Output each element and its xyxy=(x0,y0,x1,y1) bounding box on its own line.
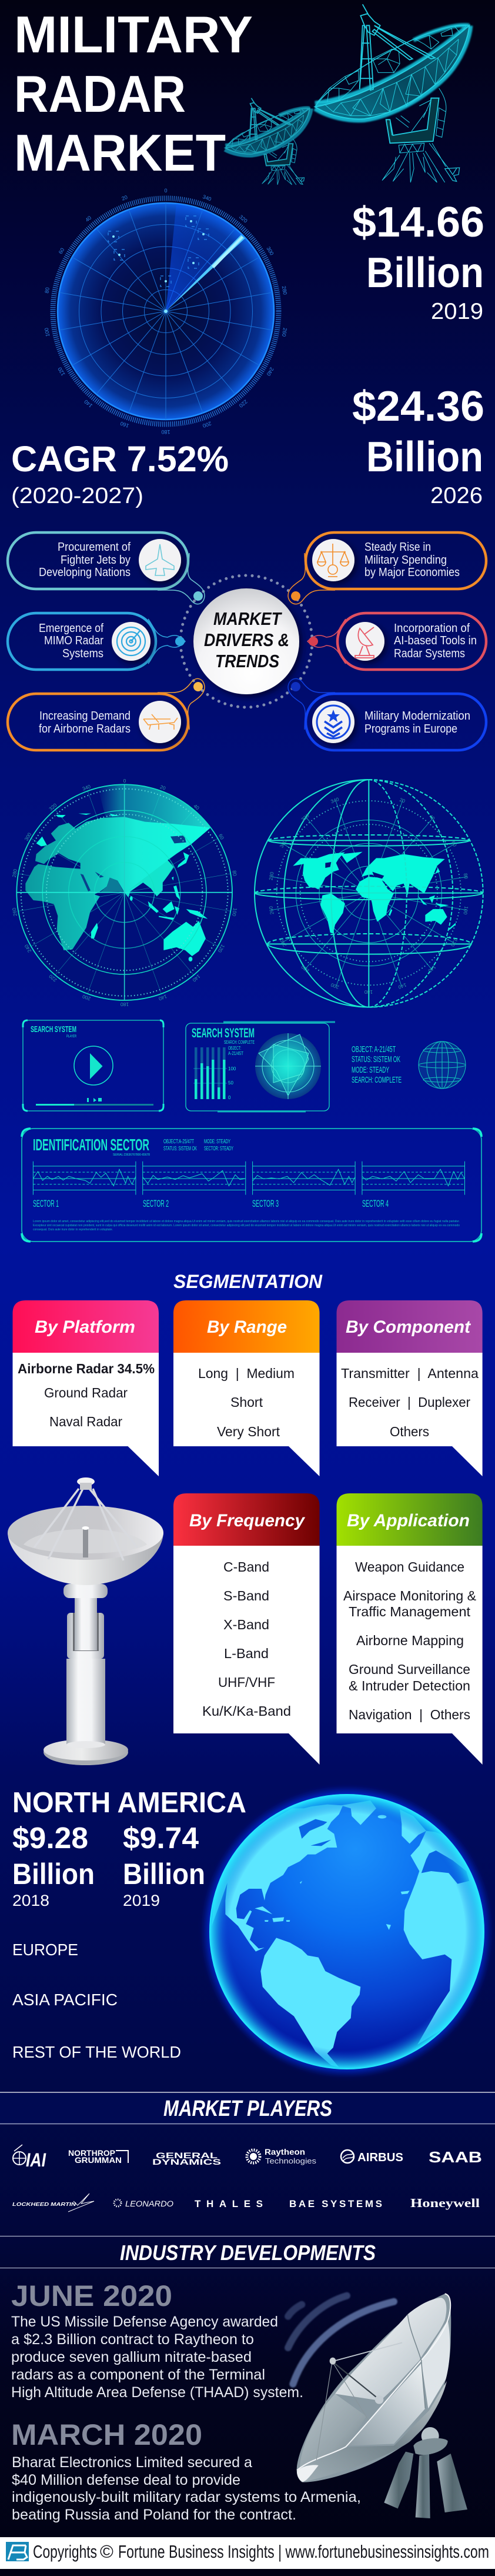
driver: emergence of MIMO radar xyxy=(8,613,156,670)
centre circle xyxy=(193,588,299,694)
region list: REST OF THE WORLD xyxy=(12,2043,181,2061)
bar chart: 50 xyxy=(228,1080,233,1086)
radar globe labels: 280 xyxy=(11,868,18,878)
title: MILITARY xyxy=(14,5,253,64)
development: March 2020: $40 Million defense deal to provide xyxy=(12,2472,240,2488)
radar degree labels: 200 xyxy=(202,420,212,429)
driver: military spending: Military Spending xyxy=(364,554,447,567)
driver: military modernization: Military Modernization xyxy=(364,710,470,723)
panel: identification sector: SERIAL:23636767800-65678 xyxy=(113,1153,150,1157)
logo: IAI: IAI xyxy=(26,2149,46,2171)
sector line charts xyxy=(33,1161,464,1195)
card: by platform xyxy=(13,1300,159,1476)
company logos xyxy=(12,2145,482,2212)
card: by frequency: L-Band xyxy=(224,1646,269,1661)
development: June 2020: a $2.3 Billion contract to Raytheon to xyxy=(11,2331,254,2348)
signal waves xyxy=(288,2296,394,2384)
icon: play button xyxy=(74,1046,113,1085)
radar degree labels: 340 xyxy=(202,194,212,202)
dish panels xyxy=(297,2294,451,2482)
heading: segmentation: SEGMENTATION xyxy=(173,1271,323,1292)
panel: identification sector: MODE: STEADY xyxy=(204,1139,230,1145)
icon: radar dish on pedestal xyxy=(8,1477,163,1765)
card: by range: Very Short xyxy=(217,1424,280,1439)
wireframe globe labels: 280 xyxy=(267,871,275,881)
card: by frequency: S-Band xyxy=(223,1588,269,1603)
development: March 2020: Bharat Electronics Limited secured a xyxy=(12,2454,252,2471)
driver: military spending: Steady Rise in xyxy=(364,541,431,554)
market players band: MARKET PLAYERS xyxy=(163,2096,332,2121)
driver: military modernization xyxy=(306,694,486,750)
wireframe globe labels: 20 xyxy=(399,797,406,804)
driver: AI-based tools xyxy=(337,613,486,670)
card: by platform: By Platform xyxy=(35,1317,135,1337)
logo: Northrop Grumman: NORTHROP xyxy=(68,2148,115,2158)
bar chart: OBJECT: xyxy=(228,1046,241,1051)
logo: BAE Systems: BAE SYSTEMS xyxy=(289,2198,382,2209)
card: by frequency xyxy=(173,1493,320,1765)
wireframe globe labels: 40 xyxy=(428,813,436,821)
stat: 2019 market size: Billion xyxy=(366,249,484,297)
dotted ring xyxy=(180,575,312,707)
wireframe globe labels xyxy=(267,796,470,995)
radar degree labels: 60 xyxy=(58,247,65,255)
radar degree labels: 0 xyxy=(164,188,168,194)
panel: identification sector: SECTOR: STEADY xyxy=(204,1146,233,1152)
region list: EUROPE xyxy=(12,1941,78,1959)
radar globe labels: 100 xyxy=(231,907,238,917)
driver: military modernization: Programs in Europe xyxy=(364,723,457,735)
radar degree labels: 80 xyxy=(44,287,51,294)
radar globe labels: 320 xyxy=(48,802,58,812)
wireframe globe labels: 260 xyxy=(267,906,275,915)
radar globe labels: 220 xyxy=(48,973,58,983)
radar degree labels: 140 xyxy=(83,398,93,409)
radar degree labels: 20 xyxy=(121,194,128,202)
driver: military spending: by Major Economies xyxy=(364,566,460,579)
feed arm xyxy=(316,2343,402,2459)
radar degree labels: 120 xyxy=(56,366,66,377)
wireframe globe labels: 100 xyxy=(462,906,470,915)
wireframe globe labels: 80 xyxy=(463,873,469,880)
region: North America stats: 2019 xyxy=(123,1892,160,1909)
footer xyxy=(0,2537,495,2569)
status text block: MODE: STEADY xyxy=(352,1065,389,1075)
development: June 2020 xyxy=(11,2279,303,2401)
card: by platform: Ground Radar xyxy=(44,1385,128,1400)
wireframe globe labels: 180 xyxy=(364,989,373,995)
logo: Northrop Grumman xyxy=(68,2148,128,2165)
driver: emergence of MIMO radar: Systems xyxy=(62,647,103,660)
development: June 2020: radars as a component of the Terminal xyxy=(11,2367,265,2383)
icon: mini wireframe globe xyxy=(419,1041,466,1089)
card: by frequency: By Frequency xyxy=(189,1511,305,1530)
fine print xyxy=(33,1220,460,1232)
card: by application: Weapon Guidance xyxy=(355,1559,464,1575)
card: by component: Others xyxy=(390,1424,429,1439)
logo: General Dynamics: DYNAMICS xyxy=(152,2157,221,2166)
development: March 2020 xyxy=(11,2418,361,2523)
sweep wedge xyxy=(98,784,210,893)
radar globe labels: 240 xyxy=(23,943,32,954)
radar globe labels: 20 xyxy=(159,784,166,791)
panel: identification sector: STATUS: SISTEM OK xyxy=(163,1146,197,1152)
development: June 2020: JUNE 2020 xyxy=(11,2279,172,2312)
stat: 2019 market size: $14.66 xyxy=(352,199,484,246)
card: by component: Transmitter | Antenna xyxy=(341,1366,479,1381)
radar targets xyxy=(108,216,209,313)
radar degree labels: 280 xyxy=(281,285,288,295)
radar degree labels: 320 xyxy=(238,214,249,224)
card: by range: By Range xyxy=(207,1317,287,1337)
bar chart: 100 xyxy=(228,1066,236,1071)
sector labels xyxy=(33,1198,389,1209)
radar degree labels: 240 xyxy=(265,366,275,377)
development: June 2020: The US Missile Defense Agency awarded xyxy=(11,2314,278,2330)
development: March 2020: indigenously-built military radar systems to Armenia, xyxy=(12,2489,361,2505)
card: by application: Airborne Mapping xyxy=(356,1633,464,1648)
stat: 2019 market size: 2019 xyxy=(431,299,483,324)
stat: 2019 market size xyxy=(352,199,484,324)
driver: AI-based tools: Radar Systems xyxy=(394,647,465,660)
card: by application: By Application xyxy=(347,1511,470,1530)
status text block xyxy=(352,1044,402,1085)
fine print: consequat. Duis aute irure dolor in reprehenderit in voluptate. xyxy=(33,1228,113,1232)
logo: Airbus xyxy=(341,2150,403,2164)
heading: IDENTIFICATION SECTOR xyxy=(33,1136,149,1154)
radar globe labels: 80 xyxy=(231,870,238,877)
bar chart xyxy=(193,1046,243,1100)
title: RADAR xyxy=(14,65,186,123)
card: by range xyxy=(173,1300,320,1476)
wireframe globe labels: 220 xyxy=(300,964,310,974)
industry developments band: INDUSTRY DEVELOPMENTS xyxy=(120,2241,376,2265)
footer: Copyrights xyxy=(33,2541,97,2562)
radar degree labels: 40 xyxy=(84,215,92,223)
wireframe globe labels: 60 xyxy=(450,840,458,848)
Eurasia and Africa xyxy=(25,817,210,950)
radar globe labels: 300 xyxy=(24,831,32,842)
card: by application: Ground Surveillance xyxy=(349,1662,470,1677)
stat: 2026 market size: Billion xyxy=(366,434,483,481)
region: North America stats xyxy=(12,1787,246,1909)
pedestal xyxy=(384,2427,467,2518)
radar degree labels: 160 xyxy=(119,420,130,429)
region: North America stats: $9.74 xyxy=(123,1821,199,1855)
centre circle: TRENDS xyxy=(215,651,279,671)
radar globe labels: 200 xyxy=(81,993,91,1002)
radar globe labels: 340 xyxy=(82,783,92,792)
logo: Lockheed Martin: LOCKHEED MARTIN xyxy=(12,2202,76,2207)
card: by frequency: X-Band xyxy=(223,1617,269,1632)
card: by application: Navigation | Others xyxy=(349,1707,470,1722)
icon: silver radar dish with waves xyxy=(288,2294,467,2518)
development: June 2020: produce seven gallium nitrate-based xyxy=(11,2349,252,2365)
card: by platform: Airborne Radar 34.5% xyxy=(18,1361,155,1376)
title xyxy=(14,5,253,182)
status text block: SEARCH: COMPLETE xyxy=(352,1075,402,1085)
development: June 2020: High Altitude Area Defense (THAAD) system. xyxy=(11,2384,303,2401)
driver: procurement of fighter jets: Fighter Jets by xyxy=(61,554,131,567)
panel: market drivers and trends xyxy=(8,532,486,750)
sector labels: SECTOR 4 xyxy=(362,1198,389,1209)
card: by frequency: Ku/K/Ka-Band xyxy=(202,1703,291,1719)
logo: Lockheed Martin xyxy=(12,2194,94,2212)
radar globe labels: 120 xyxy=(217,943,226,954)
radar globe labels: 0 xyxy=(123,778,126,784)
panel: search system player xyxy=(23,1020,163,1111)
icon: small wireframe radar dish xyxy=(225,98,310,185)
radar degree labels: 180 xyxy=(161,429,170,435)
earth globe xyxy=(201,1786,495,2078)
driver: emergence of MIMO radar: Emergence of xyxy=(39,622,103,635)
card: by range: Long | Medium xyxy=(198,1366,295,1381)
card: by component: By Component xyxy=(346,1317,471,1337)
radar scope xyxy=(44,188,288,435)
sector labels: SECTOR 3 xyxy=(252,1198,279,1209)
logo: Thales: THALES xyxy=(195,2198,263,2209)
region: North America stats: Billion xyxy=(12,1858,95,1891)
driver: airborne radars xyxy=(8,694,188,750)
title: MARKET xyxy=(14,124,226,182)
wireframe globe labels: 140 xyxy=(397,982,407,990)
region: North America stats: $9.28 xyxy=(12,1821,88,1855)
region list: ASIA PACIFIC xyxy=(12,1991,118,2009)
market players band xyxy=(0,2092,495,2124)
card: by frequency: C-Band xyxy=(223,1559,269,1575)
radar degree labels: 220 xyxy=(238,398,249,409)
card: by application: & Intruder Detection xyxy=(349,1678,470,1693)
card: by application: Traffic Management xyxy=(349,1604,471,1619)
logo: Raytheon Technologies: Technologies xyxy=(265,2156,317,2165)
status text block: STATUS: SISTEM OK xyxy=(352,1054,400,1064)
panel: search system scope: SEARCH: COMPLETE xyxy=(224,1040,255,1045)
wireframe globe with flat world map xyxy=(255,780,483,1007)
radar globe labels xyxy=(11,778,238,1007)
wireframe globe labels: 320 xyxy=(300,813,310,823)
panel: search system scope xyxy=(186,1022,335,1111)
radar globe labels: 180 xyxy=(121,1001,129,1007)
panel: identification sector xyxy=(22,1129,481,1242)
icon: Fortune Business Insights logo xyxy=(6,2542,29,2561)
connectors xyxy=(148,553,346,730)
panel: search system scope: SEARCH SYSTEM xyxy=(192,1026,255,1040)
panel: search system player: SEARCH SYSTEM xyxy=(31,1024,76,1034)
stat: 2026 market size: $24.36 xyxy=(352,383,484,430)
wireframe globe labels: 140 xyxy=(427,964,437,974)
map continents xyxy=(293,852,456,934)
sector labels: SECTOR 2 xyxy=(143,1198,169,1209)
logo: General Dynamics: GENERAL xyxy=(156,2151,218,2160)
wireframe globe labels: 240 xyxy=(278,937,287,948)
bar chart: A-21/45T xyxy=(228,1051,243,1056)
wireframe globe labels: 340 xyxy=(330,796,340,804)
region: North America stats: NORTH AMERICA xyxy=(12,1787,246,1819)
centre circle: DRIVERS & xyxy=(204,630,289,650)
stat: CAGR xyxy=(11,439,229,508)
panel: identification sector: OBJECT:A-25/47T xyxy=(163,1139,194,1145)
icon: large wireframe radar dish xyxy=(315,4,469,182)
radar degree labels: 100 xyxy=(44,327,51,337)
panel: search system player: PLAYER xyxy=(66,1035,76,1039)
driver: AI-based tools: AI-based Tools in xyxy=(394,634,477,647)
card: by application xyxy=(336,1493,483,1765)
card: by application: Airspace Monitoring & xyxy=(343,1588,476,1603)
driver: emergence of MIMO radar: MIMO Radar xyxy=(44,634,103,647)
bar chart: 0 xyxy=(228,1095,231,1100)
scope radar chart xyxy=(255,1033,321,1099)
logo: General Dynamics xyxy=(152,2151,221,2166)
sector labels: SECTOR 1 xyxy=(33,1198,59,1209)
logo: Saab: SAAB xyxy=(429,2148,482,2166)
radar globe with Eurasia sweep xyxy=(16,784,232,1000)
driver: airborne radars: Increasing Demand xyxy=(39,710,131,723)
logo: Airbus: AIRBUS xyxy=(357,2151,403,2164)
radar globe labels: 260 xyxy=(11,907,18,917)
centre circle: MARKET xyxy=(213,608,283,629)
islands xyxy=(36,814,208,956)
continents xyxy=(212,1800,495,2067)
connector nodes xyxy=(175,591,318,691)
stat: 2026 market size xyxy=(352,383,484,508)
radar globe labels: 140 xyxy=(191,973,202,983)
card: by component: Receiver | Duplexer xyxy=(349,1394,470,1410)
driver: AI-based tools: Incorporation of xyxy=(394,622,470,635)
radar globe labels: 60 xyxy=(218,833,225,841)
card: by range: Short xyxy=(230,1394,263,1410)
fine print: Excepteur sint occaecat cupidatat non proident, sunt in culpa qui officia deserunt mollit anim id est laborum. Lorem ipsum dolor sit amet, consectetur adipiscing elit,sed do eiusmod tempor incididunt ut labore et dolore magna aliqua.Ut enim ad minim veniam, quis nostrud exercitation ullamco laboris nisi ut aliquip ex ea commodo xyxy=(33,1224,460,1227)
logo: IAI xyxy=(13,2145,46,2171)
radar degree labels xyxy=(44,188,288,435)
development: March 2020: MARCH 2020 xyxy=(11,2418,202,2451)
card: by platform: Naval Radar xyxy=(49,1414,122,1429)
wireframe globe labels: 300 xyxy=(279,838,288,849)
development: March 2020: beating Russia and Poland for the contract. xyxy=(12,2507,296,2523)
driver: procurement of fighter jets: Procurement of xyxy=(58,541,131,554)
stat: CAGR: CAGR 7.52% xyxy=(11,439,229,479)
region: North America stats: 2018 xyxy=(12,1892,49,1909)
logo: Leonardo: LEONARDO xyxy=(125,2199,173,2208)
driver: military spending xyxy=(306,532,486,589)
region list xyxy=(12,1941,181,2061)
stat: 2026 market size: 2026 xyxy=(430,483,483,508)
wireframe globe labels: 200 xyxy=(330,982,340,990)
driver: procurement of fighter jets: Developing Nations xyxy=(39,566,131,579)
logo: Honeywell: Honeywell xyxy=(410,2196,480,2210)
driver: airborne radars: for Airborne Radars xyxy=(39,723,131,735)
card: by component xyxy=(336,1300,483,1476)
logo: Raytheon Technologies xyxy=(247,2147,317,2165)
fine print: Lorem ipsum dolor sit amet, consectetur adipiscing elit,sed do eiusmod tempor incididunt ut labore et dolore magna aliqua.Ut enim ad minim veniam, quis nostrud exercitation ullamco laboris nisi ut aliquip ex ea commodo consequat. Duis aute irure dolor in reprehenderit in voluptate velit esse cillum dolore eu fugiat nulla pariatur. xyxy=(33,1220,460,1223)
radar degree labels: 260 xyxy=(281,327,288,337)
region: North America stats: Billion xyxy=(123,1858,205,1891)
stat: CAGR: (2020-2027) xyxy=(11,484,143,508)
footer: © xyxy=(100,2541,113,2562)
radar sweep xyxy=(166,204,245,311)
radar globe labels: 40 xyxy=(192,803,200,811)
wireframe globe labels: 120 xyxy=(449,937,459,948)
driver: procurement of fighter jets xyxy=(8,532,188,589)
logo: Northrop Grumman: GRUMMAN xyxy=(75,2155,122,2165)
card: by frequency: UHF/VHF xyxy=(218,1675,275,1690)
logo: Raytheon Technologies: Raytheon xyxy=(265,2147,305,2156)
status text block: OBJECT: A-21/45T xyxy=(352,1044,396,1054)
radar globe labels: 140 xyxy=(158,993,168,1002)
radar degree labels: 300 xyxy=(265,245,275,257)
